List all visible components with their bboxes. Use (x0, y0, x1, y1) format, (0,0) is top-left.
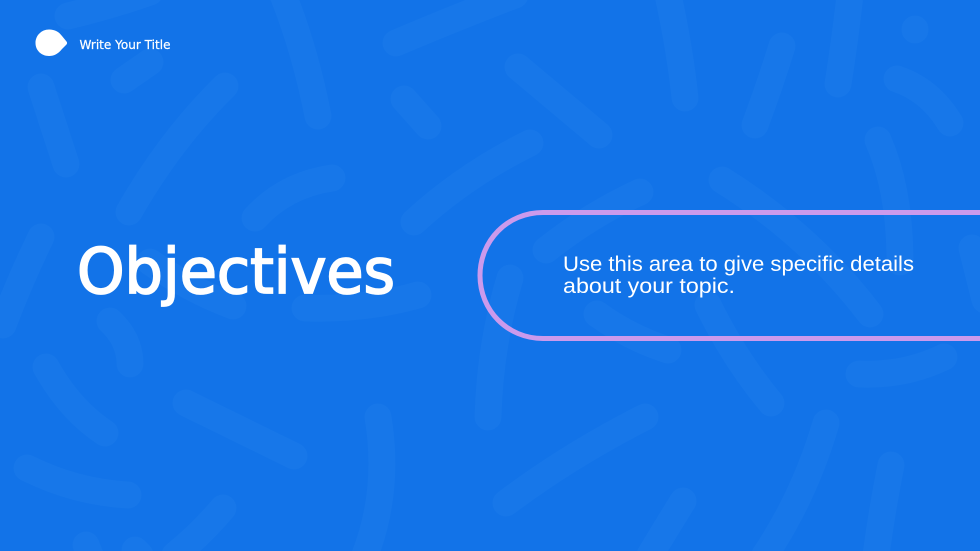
main heading: Objectives (77, 235, 395, 308)
description text: about your topic. (563, 275, 735, 298)
pill outline callout (480, 212, 980, 338)
logo: white drop icon (36, 30, 67, 56)
header title: Write Your Title (80, 38, 170, 52)
description text: Use this area to give specific details (563, 253, 914, 276)
description text (563, 253, 914, 298)
